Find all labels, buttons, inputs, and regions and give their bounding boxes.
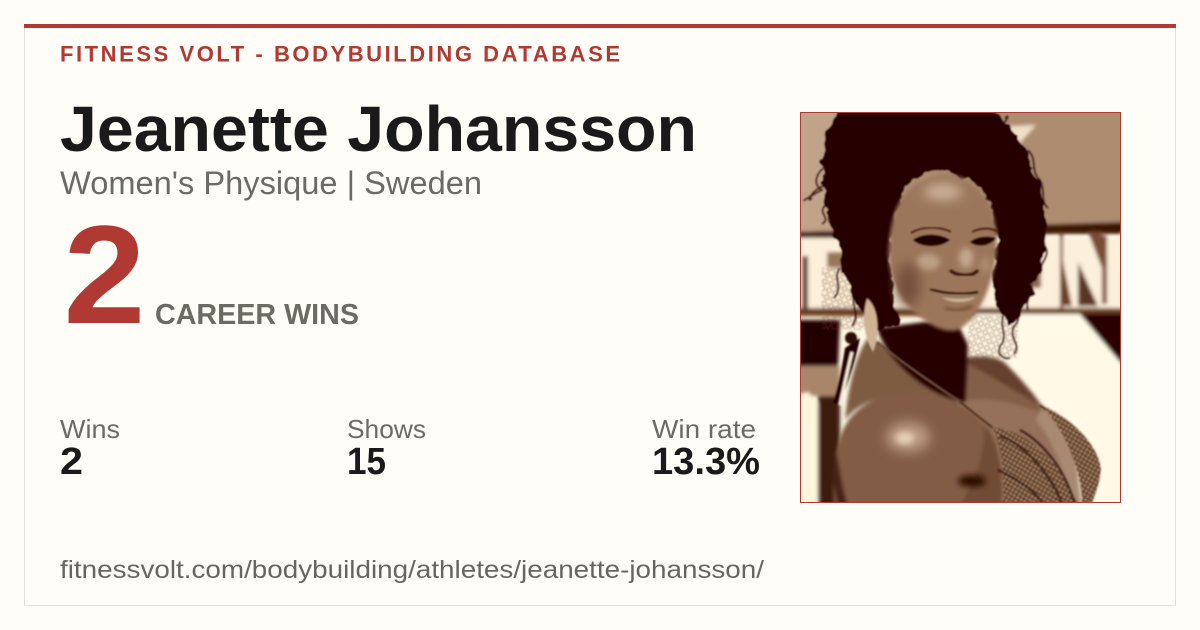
lace curls over light background (822, 268, 1018, 358)
face (889, 174, 997, 331)
neck shadow (877, 318, 968, 402)
photo background (795, 108, 1125, 512)
stat: wins: Wins (60, 414, 120, 444)
torso (833, 338, 1082, 506)
bikini (960, 402, 1101, 503)
stat: win rate (652, 414, 760, 483)
stat: win rate: Win rate (652, 414, 756, 444)
hair (823, 106, 1046, 332)
stat: shows: 15 (347, 441, 386, 483)
brand heading: FITNESS VOLT - BODYBUILDING DATABASE (60, 42, 620, 66)
stat: wins (60, 414, 120, 483)
profile url: fitnessvolt.com/bodybuilding/athletes/jeanette-johansson/ (60, 556, 764, 584)
athlete photo (795, 106, 1125, 512)
career wins number: 2 (64, 196, 146, 353)
curl strands (804, 116, 1048, 358)
career wins label: CAREER WINS (155, 299, 359, 331)
stat: win rate: 13.3% (652, 441, 760, 483)
stat: shows: Shows (347, 414, 426, 444)
athlete name: Jeanette Johansson (60, 93, 697, 165)
stat: wins: 2 (60, 441, 83, 483)
stat: shows (347, 414, 426, 483)
shoulder highlight (886, 422, 930, 452)
division and country: Women's Physique | Sweden (60, 165, 482, 201)
earring and strap (833, 298, 878, 405)
